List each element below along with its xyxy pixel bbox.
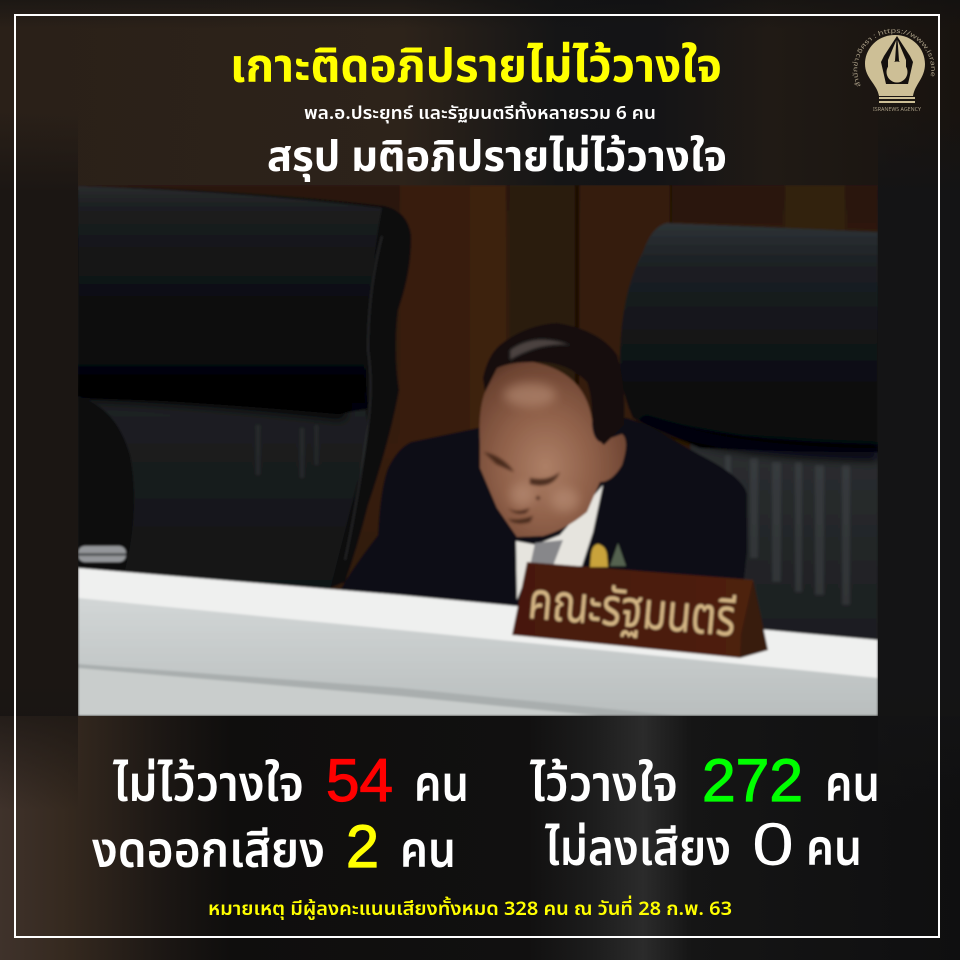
result: abstain 2: คน (400, 814, 456, 890)
result: abstain 2: 2 (346, 813, 379, 880)
pen-nib lightbulb icon (865, 35, 925, 103)
nameplate (512, 562, 768, 660)
heading: vote summary: สรุป มติอภิปรายไม่ไว้วางใจ (267, 126, 727, 191)
title: เกาะติดอภิปรายไม่ไว้วางใจ (230, 33, 722, 104)
result: abstain 2: งดออกเสียง (92, 814, 325, 890)
desk top (78, 566, 878, 680)
photo: cabinet minister at desk (78, 185, 878, 716)
subtitle: พล.อ.ประยุทธ์ และรัฐมนตรีทั้งหลายรวม 6 คน (304, 101, 656, 128)
left chair silhouette (78, 186, 411, 590)
result: no confidence 54 (112, 747, 469, 824)
logo: Isranews Agency: ISRANEWS AGENCY (873, 107, 921, 114)
result: confidence 272: ไว้วางใจ (529, 748, 678, 824)
headrest shadow (78, 392, 345, 412)
result: no vote 0: ไม่ลงเสียง (544, 812, 731, 888)
right chair headrest (620, 223, 878, 452)
person: facial shadows (484, 452, 560, 523)
shadowed person at left edge (78, 398, 134, 570)
result: no confidence 54: 54 (326, 747, 393, 814)
person: face highlights (504, 383, 579, 512)
result: no confidence 54: คน (414, 748, 469, 824)
person: lapel pins (590, 543, 626, 567)
left chair headrest (78, 186, 382, 414)
result: confidence 272 (529, 747, 880, 824)
nameplate engraved text: คณะรัฐมนตรี (525, 564, 739, 660)
person: face (480, 361, 626, 537)
result: confidence 272: คน (825, 748, 880, 824)
person: collar and tie (516, 485, 603, 600)
result: confidence 272: 272 (702, 747, 803, 814)
microphone base (78, 546, 126, 562)
person: suit jacket (342, 418, 748, 605)
result: abstain 2 (92, 813, 456, 890)
logo: Isranews Agency (852, 28, 935, 114)
left chair pleat highlights (256, 425, 318, 478)
result: no vote 0 (544, 811, 862, 888)
result: no vote 0: 0 (752, 811, 794, 878)
right headrest shadow (640, 420, 878, 454)
right chair lower back (690, 440, 878, 650)
left chair lower back (78, 398, 367, 590)
desk front (78, 598, 878, 716)
result: no vote 0: คน (806, 812, 862, 888)
wood panel wall (96, 185, 878, 592)
headrest seam (345, 236, 382, 560)
person: hair (483, 323, 624, 445)
footnote: หมายเหตุ มีผู้ลงคะแนนเสียงทั้งหมด 328 คน ณ วันที่ 28 ก.พ. 63 (208, 895, 732, 924)
result: no confidence 54: ไม่ไว้วางใจ (112, 748, 304, 824)
